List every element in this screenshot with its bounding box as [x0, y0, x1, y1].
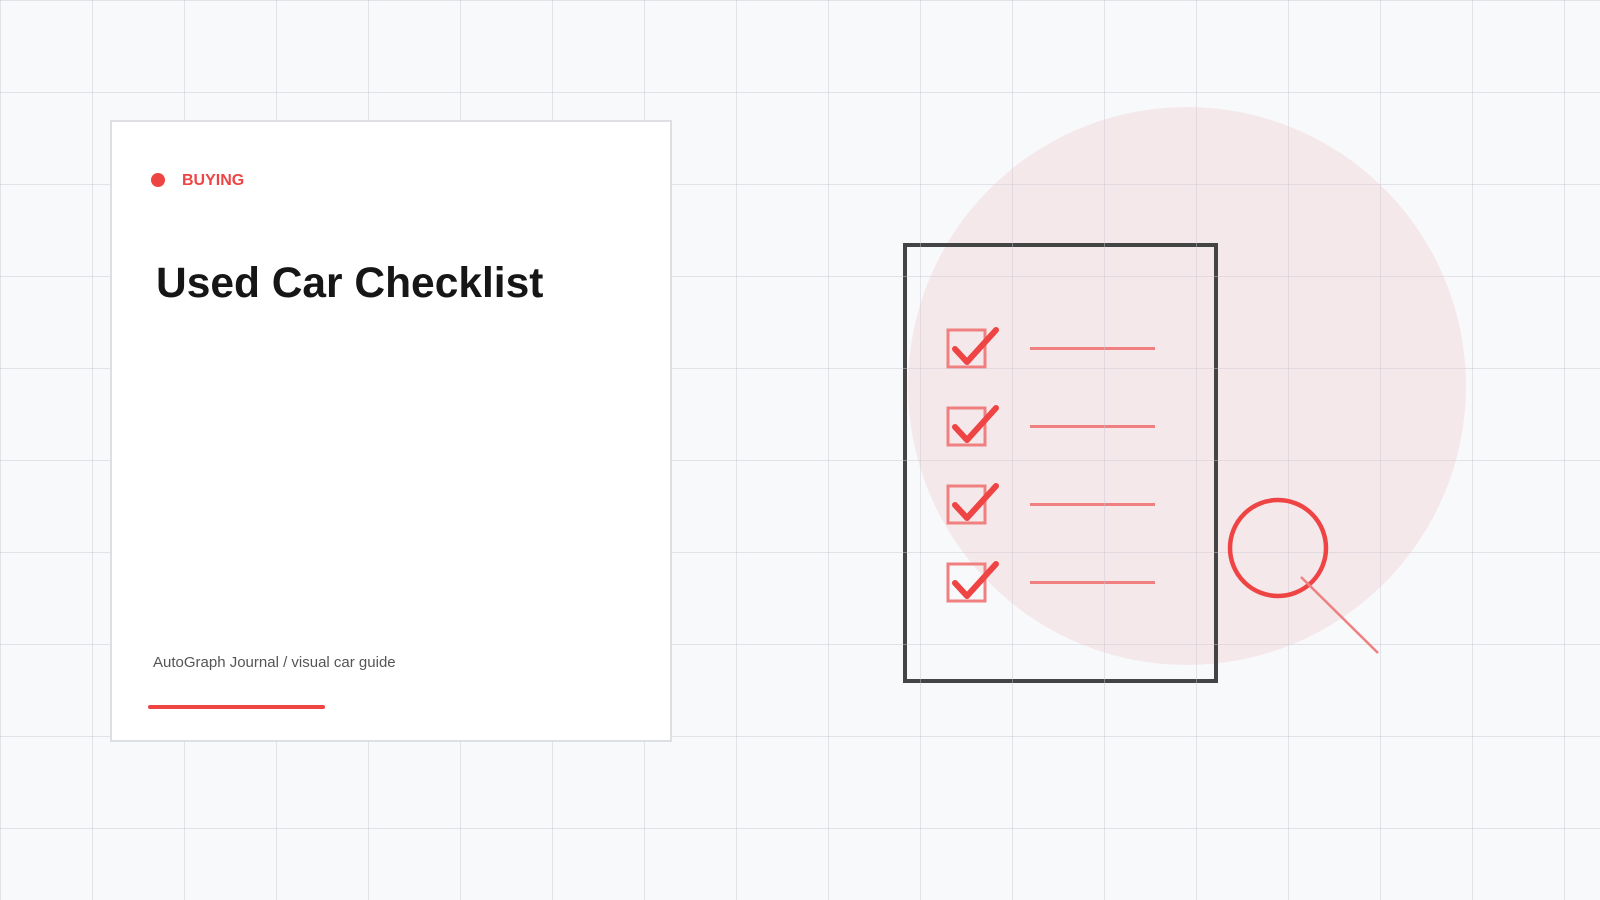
category tag [151, 172, 244, 189]
category tag: BUYING [182, 172, 244, 189]
red accent bar [148, 705, 325, 709]
card panel [110, 120, 672, 742]
checklist rows [948, 330, 1155, 601]
footer credit: AutoGraph Journal / visual car guide [153, 654, 396, 671]
pink background circle [908, 107, 1466, 665]
document outline [905, 245, 1216, 681]
title: Used Car Checklist [156, 260, 543, 307]
